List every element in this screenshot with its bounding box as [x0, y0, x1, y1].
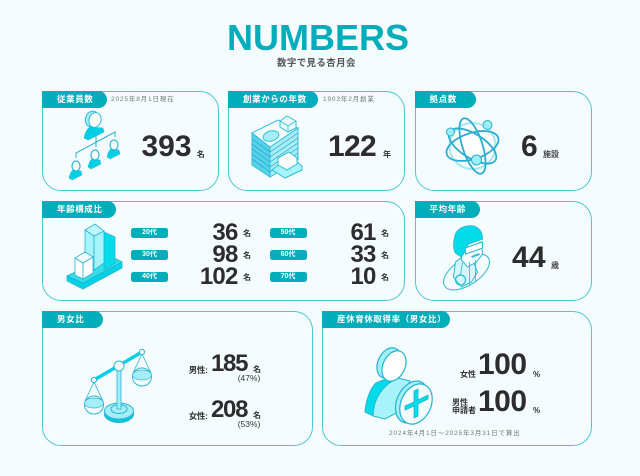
panel: average age: [414, 201, 592, 301]
unit: 50s: 名: [381, 229, 389, 238]
label: female leave: 女性: [460, 370, 476, 379]
label: 70s: [270, 272, 306, 282]
label: male: 男性:: [189, 365, 208, 375]
unit: 20s: 名: [243, 229, 251, 238]
tab: gender ratio: [42, 311, 103, 328]
row: 30s: [131, 241, 251, 268]
tab: average age: 平均年齢: [430, 204, 466, 214]
number: male: 185: [211, 350, 247, 377]
number: 50s: 61: [350, 219, 376, 246]
tab: years: 創業からの年数: [243, 94, 307, 104]
panel: locations: [414, 91, 592, 191]
unit: 60s: 名: [381, 251, 389, 260]
label: 30s: [131, 250, 168, 260]
tab: average age: [414, 201, 480, 218]
label: 30s: 30代: [142, 251, 157, 258]
number: employees: 393: [142, 130, 192, 163]
tab: parental leave: [322, 311, 450, 328]
panel: parental leave: [322, 311, 592, 446]
note: employees date: 2025年8月1日現在: [111, 96, 175, 103]
number: years: 122: [328, 130, 376, 163]
unit: female: 名: [253, 411, 261, 420]
label: male applicants: 男性: [452, 398, 468, 407]
tab: locations: 拠点数: [430, 94, 457, 104]
label: 20s: [131, 228, 168, 238]
tab: employees: [42, 91, 107, 108]
panel: age composition: [42, 201, 405, 301]
tab: locations: [414, 91, 476, 108]
tab: age composition: 年齢構成比: [57, 204, 103, 214]
icon: organization people: [68, 110, 120, 180]
icon: balance scale: [84, 348, 152, 423]
unit: employees: 名: [197, 150, 205, 159]
unit: male leave percent: %: [533, 406, 540, 415]
label: 40s: [131, 272, 168, 282]
label: 60s: 60代: [281, 251, 295, 258]
number: 20s: 36: [212, 219, 238, 246]
percent: male: (47%): [238, 373, 260, 383]
icon: doctor: [443, 225, 490, 290]
label: 50s: 50代: [281, 229, 295, 236]
number: female: 208: [211, 396, 247, 423]
panel: years since founding: [228, 91, 405, 191]
tab: parental leave: 産休育休取得率（男女比）: [337, 314, 446, 324]
tab: years: [228, 91, 318, 108]
unit: 30s: 名: [243, 251, 251, 260]
unit: locations: 施設: [543, 150, 559, 159]
unit: male: 名: [253, 365, 261, 374]
tab: age composition: [42, 201, 116, 218]
unit: female leave percent: %: [533, 370, 540, 379]
number: locations: 6: [521, 130, 538, 163]
label: 50s: [270, 228, 306, 238]
label: 40s: 40代: [142, 273, 157, 280]
label: 20s: 20代: [142, 229, 157, 236]
note: calculation period: 2024年4月1日～2025年3月31日で算出: [389, 430, 521, 437]
number: 40s: 102: [200, 263, 238, 290]
icon: bar chart: [66, 224, 123, 290]
unit: years: 年: [383, 150, 391, 159]
tab: employees: 従業員数: [57, 94, 93, 104]
row: 20s: [131, 219, 251, 246]
label: 60s: [270, 250, 306, 260]
panel: gender ratio: [42, 311, 313, 446]
label: male applicants: 申請者: [452, 406, 476, 414]
number: 30s: 98: [212, 241, 238, 268]
row: 70s: [270, 263, 389, 290]
number: male leave: 100: [478, 385, 527, 418]
unit: average age: 歳: [551, 261, 559, 270]
title: NUMBERS: [227, 16, 409, 58]
icon: building: [251, 115, 302, 179]
tab: gender ratio: 男女比: [57, 314, 84, 324]
icon: globe network: [446, 117, 500, 175]
unit: 40s: 名: [243, 273, 251, 282]
percent: female: (53%): [238, 419, 260, 429]
icon: person with plus: [364, 347, 433, 425]
number: female leave: 100: [478, 348, 527, 381]
number: 70s: 10: [350, 263, 376, 290]
note: founding date: 1903年2月創業: [323, 96, 375, 103]
row: 40s: [131, 263, 251, 290]
number: 60s: 33: [350, 241, 376, 268]
number: average age: 44: [512, 240, 546, 274]
panel: employees: [42, 91, 219, 191]
label: female: 女性:: [189, 411, 208, 421]
unit: 70s: 名: [381, 273, 389, 282]
subtitle: 数字で見る杏月会: [277, 58, 356, 69]
label: 70s: 70代: [281, 273, 295, 280]
label: male applicants: [452, 398, 476, 414]
row: 50s: [270, 219, 389, 246]
row: 60s: [270, 241, 389, 268]
